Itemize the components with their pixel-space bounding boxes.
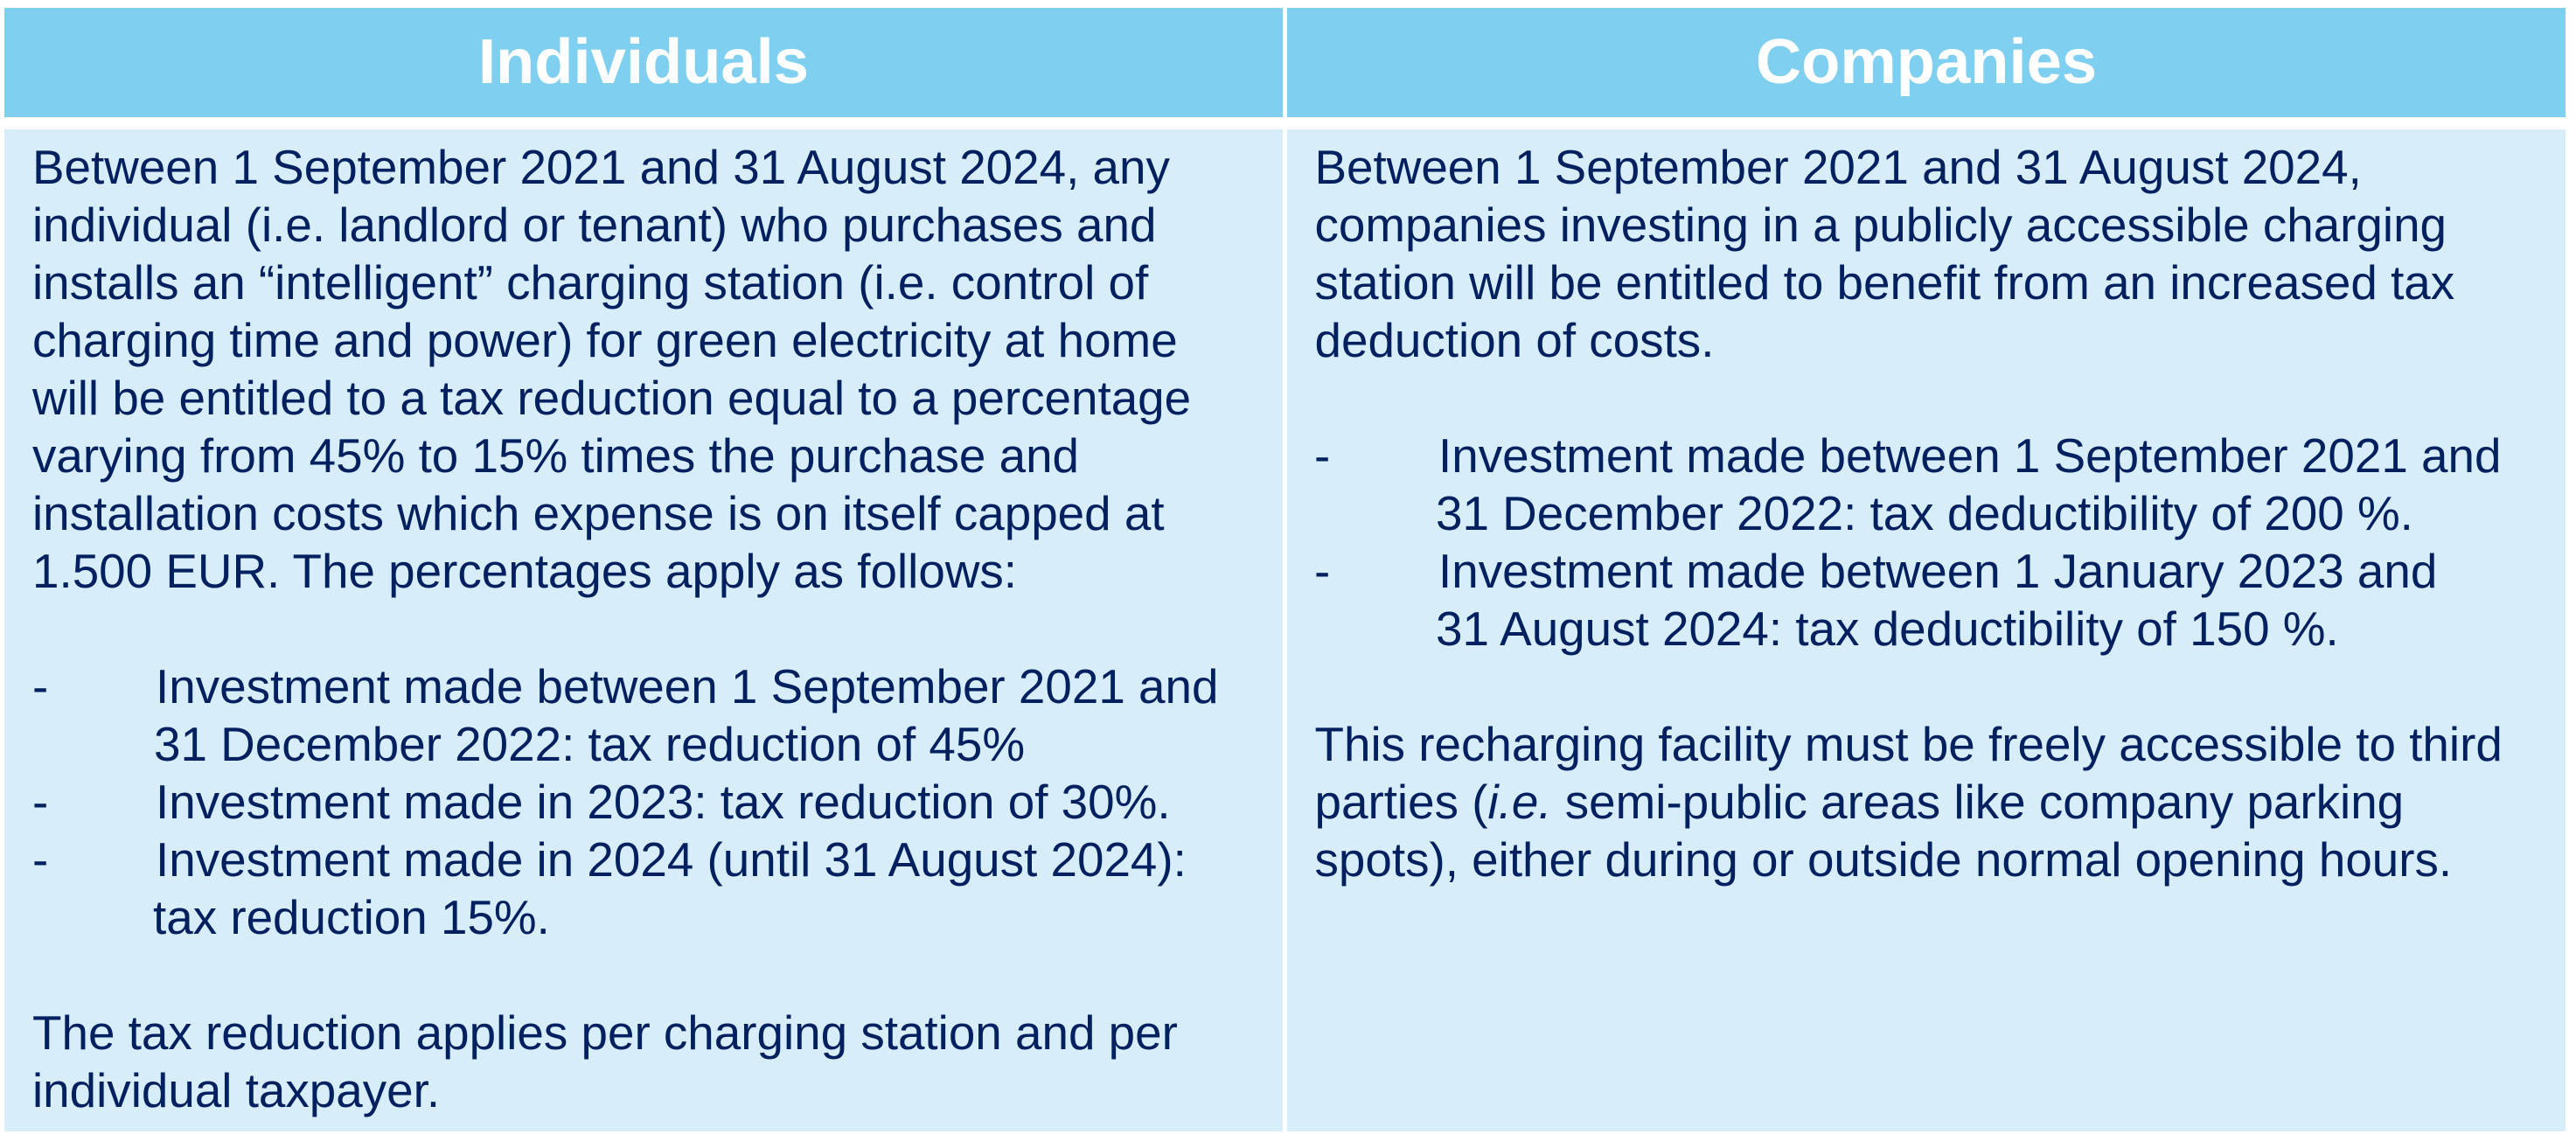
text block: companies deductibility list: Investment made between 1 September 2021 and <box>1438 428 2501 483</box>
panel: individuals header <box>4 8 1283 117</box>
text block: individuals percentages list: Investment made between 1 September 2021 and <box>156 659 1218 713</box>
text block: individuals percentages list <box>32 659 1218 944</box>
text block: individuals intro: will be entitled to a tax reduction equal to a percentage <box>31 371 1191 425</box>
heading: Individuals: Individuals <box>478 26 809 97</box>
text block: individuals percentages list: tax reduction 15%. <box>153 890 550 944</box>
text block: companies deductibility list: 31 December 2022: tax deductibility of 200 %. <box>1436 486 2413 540</box>
panel: companies header <box>1287 8 2566 117</box>
text block: companies intro <box>1315 140 2454 367</box>
text block: companies accessibility note <box>1315 717 2503 887</box>
text block: companies deductibility list: - <box>1314 428 1330 483</box>
text block: individuals intro <box>31 140 1191 598</box>
text block: individuals percentages list: - <box>32 832 48 887</box>
text block: individuals intro: installs an “intelligent” charging station (i.e. control of <box>32 255 1149 310</box>
text block: individuals percentages list: - <box>32 659 48 713</box>
text block: companies intro: companies investing in a publicly accessible charging <box>1315 198 2447 252</box>
heading: Companies: Companies <box>1756 26 2097 97</box>
text block: individuals closing note: The tax reduction applies per charging station and per <box>32 1005 1178 1060</box>
text block: individuals percentages list: - <box>32 775 48 829</box>
text block: companies accessibility note: This recharging facility must be freely accessible to third <box>1315 717 2503 771</box>
text block: individuals closing note: individual taxpayer. <box>32 1063 440 1117</box>
text block: companies deductibility list: - <box>1314 544 1330 598</box>
text block: individuals percentages list: Investment made in 2023: tax reduction of 30%. <box>156 775 1171 829</box>
text block: individuals percentages list: 31 December 2022: tax reduction of 45% <box>154 717 1025 771</box>
text block: individuals percentages list: Investment made in 2024 (until 31 August 2024): <box>156 832 1187 887</box>
panel: individuals body <box>4 129 1283 1131</box>
text block: companies intro: deduction of costs. <box>1315 313 1714 367</box>
text block: companies accessibility note: spots), either during or outside normal opening hours. <box>1315 832 2452 887</box>
text block: companies deductibility list: 31 August 2024: tax deductibility of 150 %. <box>1436 602 2339 656</box>
text block: individuals intro: Between 1 September 2021 and 31 August 2024, any <box>32 140 1170 194</box>
text block: individuals intro: installation costs which expense is on itself capped at <box>32 486 1165 540</box>
text block: companies intro: Between 1 September 2021 and 31 August 2024, <box>1315 140 2362 194</box>
text block: individuals intro: varying from 45% to 15% times the purchase and <box>32 428 1079 483</box>
panel: companies body <box>1287 129 2566 1131</box>
text block: individuals closing note <box>32 1005 1178 1117</box>
text block: individuals intro: individual (i.e. landlord or tenant) who purchases and <box>32 198 1156 252</box>
text block: companies deductibility list: Investment made between 1 January 2023 and <box>1438 544 2437 598</box>
text block: companies intro: station will be entitled to benefit from an increased tax <box>1315 255 2454 310</box>
text block: companies deductibility list <box>1314 428 2501 656</box>
text block: companies accessibility note: parties (i.e. semi-public areas like company parking <box>1315 775 2404 829</box>
text block: individuals intro: 1.500 EUR. The percentages apply as follows: <box>32 544 1017 598</box>
text block: individuals intro: charging time and power) for green electricity at home <box>32 313 1178 367</box>
